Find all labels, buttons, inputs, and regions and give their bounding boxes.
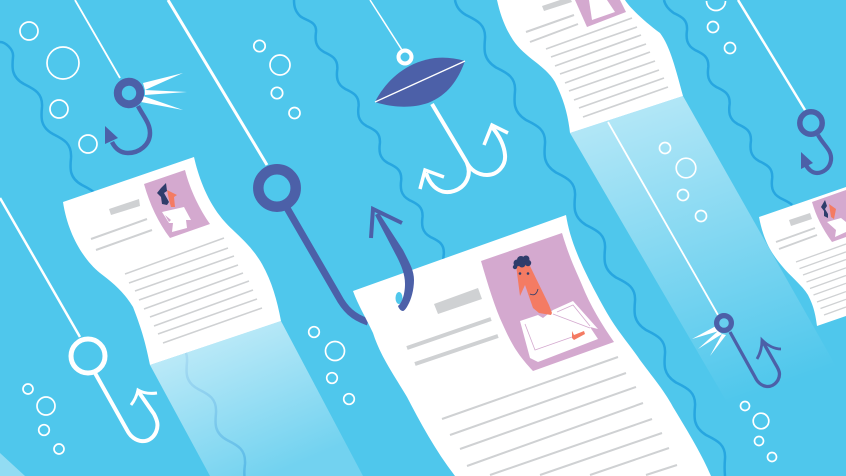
head <box>516 264 552 315</box>
hook: bottom right with sparkle <box>608 122 781 386</box>
name block: left resume <box>109 199 140 215</box>
eyes <box>519 272 521 275</box>
person: left resume <box>157 183 191 232</box>
shirt <box>520 301 598 362</box>
hook: white bottom left <box>0 198 157 441</box>
resume: left <box>63 157 281 365</box>
text lines: right resume <box>776 228 846 315</box>
bubbles: top centre <box>254 40 300 118</box>
hook: large blue centre, shank behind resume <box>168 0 368 322</box>
resume: large centre <box>353 215 711 476</box>
text lines: large resume <box>407 319 677 475</box>
bubbles: top left <box>20 22 97 153</box>
hair <box>513 256 531 269</box>
light trail: corner <box>0 453 25 476</box>
hook: lure with double barb <box>370 0 508 192</box>
barb hole <box>396 292 402 304</box>
hook: small blue top left with sparkle <box>75 0 187 153</box>
name block: top resume <box>542 0 572 11</box>
photo: large resume <box>481 233 614 371</box>
text lines: left resume <box>91 219 262 343</box>
hand <box>572 331 585 340</box>
arm outlines <box>525 305 590 350</box>
photo shirt: top resume <box>589 0 615 20</box>
barb shaft <box>375 213 414 311</box>
barb arrowhead <box>371 209 402 238</box>
photo: right resume <box>812 190 846 242</box>
light trail: top resume <box>570 96 846 476</box>
resume: top centre <box>497 0 683 133</box>
bubbles: lower centre <box>309 327 354 404</box>
photo: left resume <box>144 170 210 238</box>
text lines: top resume <box>526 15 668 117</box>
hook: small blue top right <box>738 0 831 173</box>
hook barb: large hook in front of resume <box>371 209 414 311</box>
name block: large resume <box>434 288 482 314</box>
bubbles: bottom right <box>740 402 776 462</box>
bubbles: top right <box>706 1 736 54</box>
resume: right edge <box>759 187 846 326</box>
bubbles: in right trail <box>660 142 706 222</box>
photo: top resume <box>575 0 626 27</box>
bubbles: bottom left <box>23 384 64 454</box>
person: right resume <box>821 200 846 237</box>
name block: right resume <box>789 213 812 226</box>
light trail: left resume <box>150 321 363 476</box>
smile <box>530 289 538 295</box>
person: large resume <box>513 256 598 362</box>
